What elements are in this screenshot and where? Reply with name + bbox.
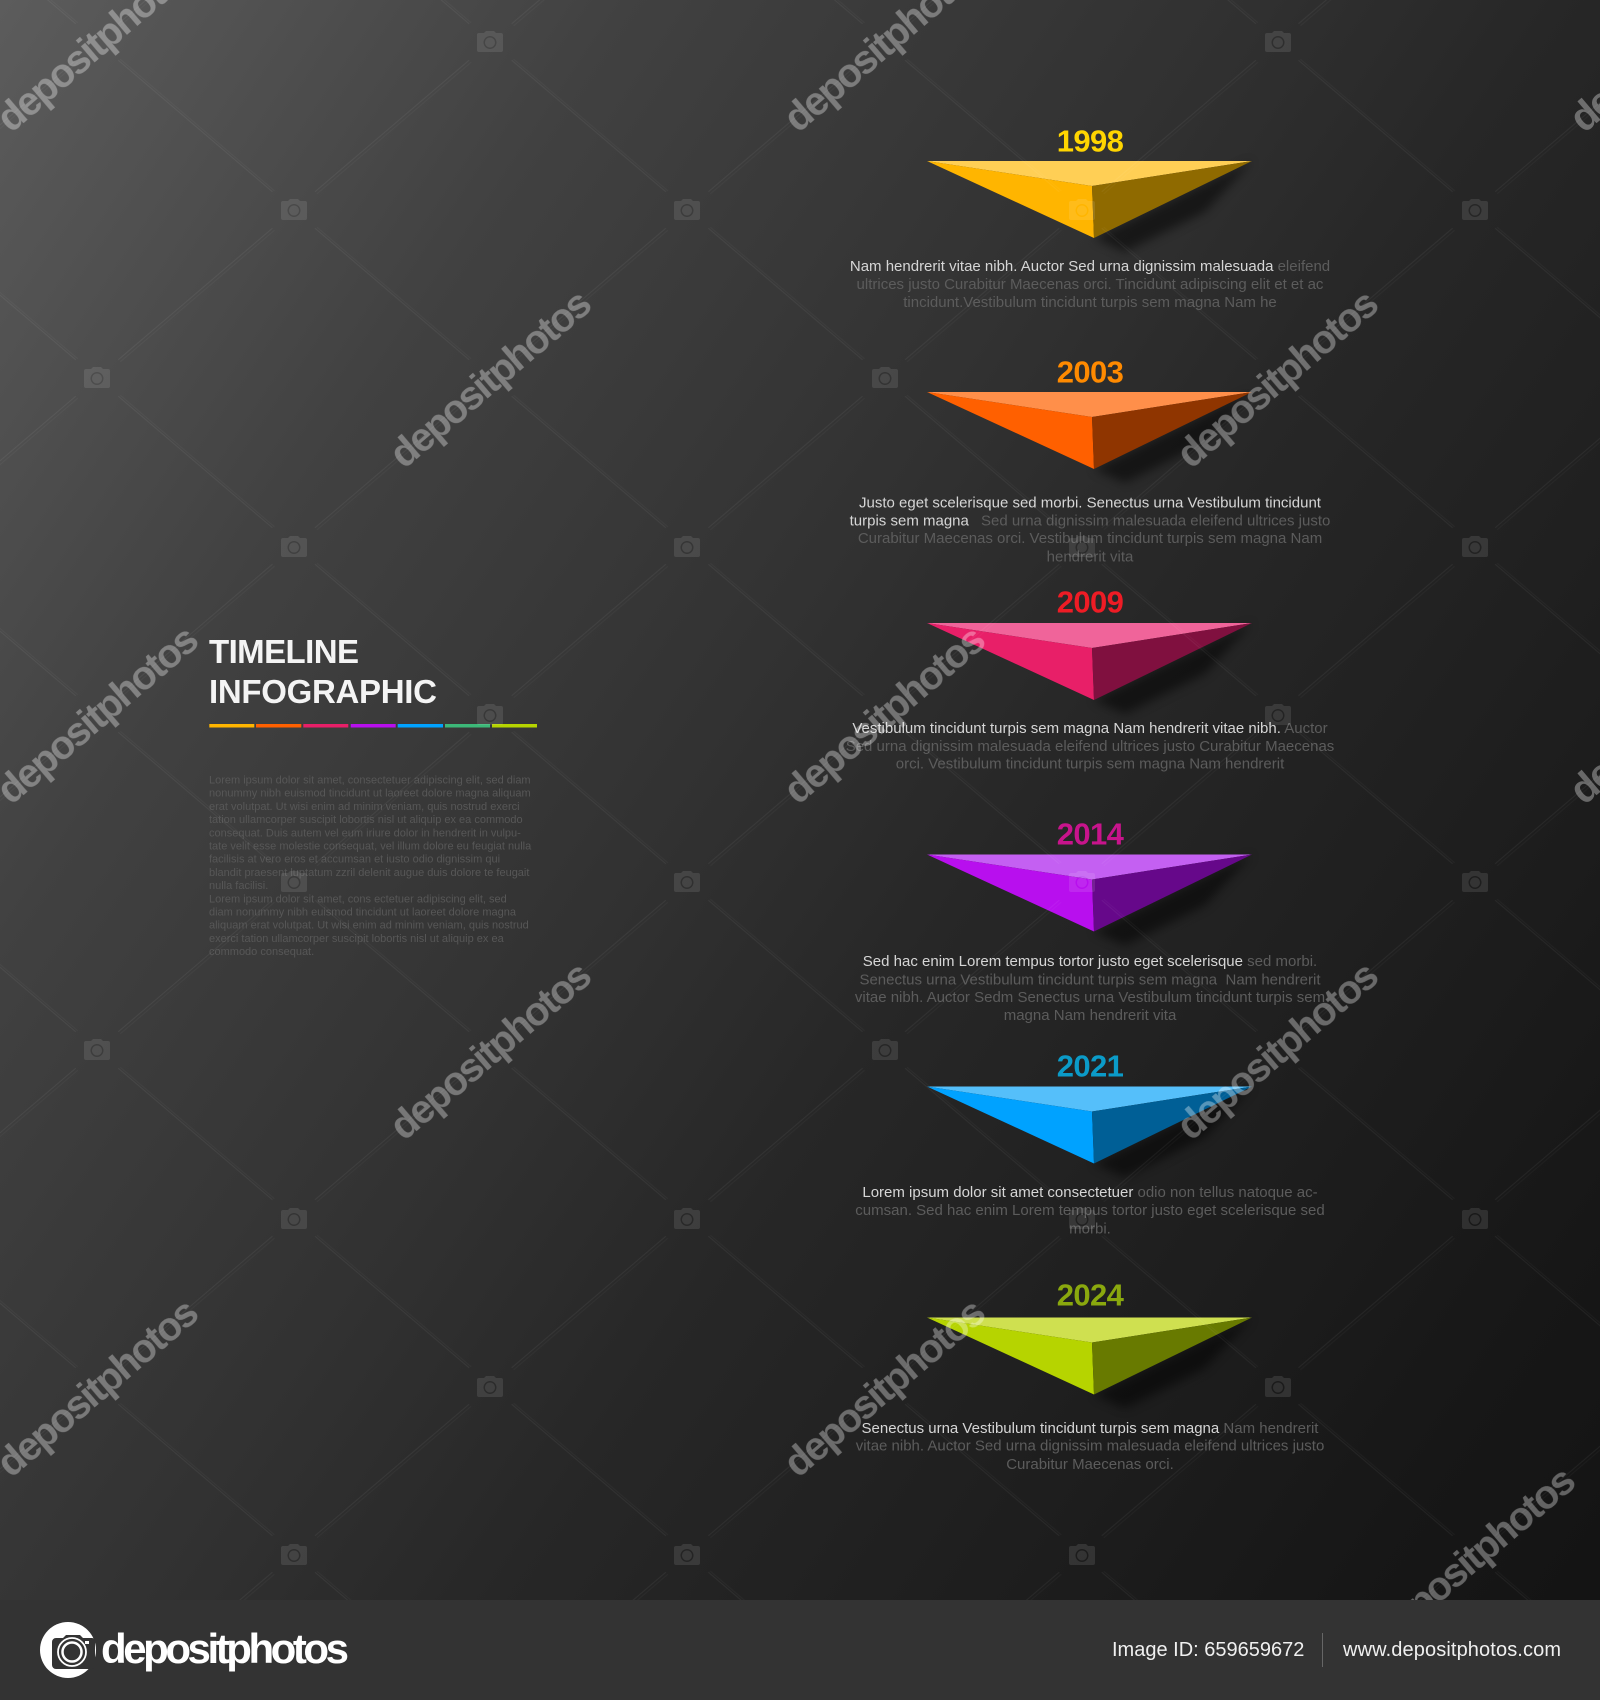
triangle 2009: [927, 623, 1252, 714]
intro paragraph: tation ullamcorper suscipit lobortis nisl ut aliquip ex ea commodo: [209, 814, 523, 826]
description 2003: turpis sem magna Sed urna dignissim malesuada eleifend ultrices justo: [850, 512, 1330, 530]
description 2003: Justo eget scelerisque sed morbi. Senectus urna Vestibulum tincidunt: [859, 494, 1322, 512]
description 2024: Curabitur Maecenas orci.: [1006, 1456, 1174, 1473]
triangle 1998: [927, 161, 1252, 252]
footer url: www.depositphotos.com: [1342, 1639, 1561, 1661]
watermark camera icons: [84, 31, 1488, 1565]
title: TIMELINE: [209, 633, 359, 670]
intro paragraph: consequat. Duis autem vel eum iriure dolor in hendrerit in vulpu-: [209, 827, 521, 839]
description 2014: magna Nam hendrerit vita: [1004, 1007, 1177, 1024]
triangle 2014: [927, 854, 1252, 946]
description 2024: [856, 1420, 1324, 1473]
footer bar: [0, 1600, 1600, 1700]
image id: Image ID: 659659672: [1112, 1639, 1304, 1661]
year 2003: 2003: [1057, 354, 1124, 390]
intro paragraph: aliquam erat volutpat. Ut wisi enim ad minim veniam, quis nostrud: [209, 920, 529, 932]
title: INFOGRAPHIC: [209, 673, 437, 710]
watermark wordmarks: depositphotos: [1168, 281, 1387, 477]
description 1998: Nam hendrerit vitae nibh. Auctor Sed urna dignissim malesuada eleifend: [850, 258, 1330, 275]
watermark wordmarks: depositphotos: [775, 617, 994, 813]
description 2021: cumsan. Sed hac enim Lorem tempus tortor justo eget scelerisque sed: [855, 1202, 1325, 1219]
year 2024: 2024: [1057, 1278, 1125, 1312]
timeline item: 2021: [855, 1048, 1325, 1238]
description 2014: vitae nibh. Auctor Sedm Senectus urna Vestibulum tincidunt turpis sem: [855, 989, 1325, 1006]
description 2024: Senectus urna Vestibulum tincidunt turpis sem magna Nam hendrerit: [862, 1420, 1319, 1437]
description 2021: [855, 1184, 1325, 1238]
description 1998: ultrices justo Curabitur Maecenas orci. Tincidunt adipiscing elit et et ac: [857, 276, 1324, 293]
description 2014: [855, 953, 1325, 1024]
triangle 2003: [927, 392, 1252, 483]
intro paragraph: [209, 774, 532, 958]
watermark wordmarks: depositphotos: [381, 953, 600, 1149]
description 2009: Vestibulum tincidunt turpis sem magna Nam hendrerit vitae nibh. Auctor: [852, 720, 1328, 737]
logo wordmark: depositphotos: [101, 1625, 349, 1672]
watermark wordmarks: depositphotos: [775, 1290, 994, 1486]
watermark wordmarks: depositphotos: [1168, 953, 1387, 1149]
triangle 2021: [927, 1086, 1252, 1178]
footer divider: [1322, 1633, 1323, 1667]
intro paragraph: blandit praesent luptatum zzril delenit augue duis dolore te feugait: [209, 867, 529, 879]
timeline item: 2009: [846, 584, 1334, 772]
title colour bar: [209, 724, 537, 728]
intro paragraph: nonummy nibh euismod tincidunt ut laoreet dolore magna aliquam: [209, 788, 531, 800]
description 2021: morbi.: [1069, 1220, 1111, 1238]
intro paragraph: Lorem ipsum dolor sit amet, consectetuer adipiscing elit, sed diam: [209, 774, 531, 786]
intro paragraph: erat volutpat. Ut wisi enim ad minim veniam, quis nostrud exerci: [209, 801, 520, 813]
description 2003: [850, 494, 1330, 566]
title: [209, 633, 437, 710]
year 2014: 2014: [1057, 816, 1125, 852]
description 1998: tincidunt.Vestibulum tincidunt turpis sem magna Nam he: [903, 294, 1277, 311]
intro paragraph: nulla facilisi.: [209, 880, 268, 892]
timeline item: 2014: [855, 816, 1325, 1024]
timeline item: 1998: [850, 124, 1330, 311]
intro paragraph: Lorem ipsum dolor sit amet, cons ectetuer adipiscing elit, sed: [209, 893, 507, 905]
timeline item: 2003: [850, 354, 1330, 566]
description 2009: orci. Vestibulum tincidunt turpis sem magna Nam hendrerit: [896, 756, 1285, 772]
description 2024: vitae nibh. Auctor Sed urna dignissim malesuada eleifend ultrices justo: [856, 1438, 1324, 1454]
year 1998: 1998: [1057, 124, 1124, 158]
triangle 2024: [927, 1318, 1252, 1408]
description 2014: Sed hac enim Lorem tempus tortor justo eget scelerisque sed morbi.: [863, 953, 1317, 970]
description 2009: Sed urna dignissim malesuada eleifend ultrices justo Curabitur Maecenas: [846, 738, 1334, 755]
description 1998: [850, 258, 1330, 311]
timeline item: 2024: [856, 1278, 1324, 1473]
description 2009: [846, 720, 1334, 772]
intro paragraph: diam nonummy nibh euismod tincidunt ut laoreet dolore magna: [209, 906, 517, 918]
description 2003: hendrerit vita: [1047, 548, 1134, 566]
description 2003: Curabitur Maecenas orci. Vestibulum tincidunt turpis sem magna Nam: [858, 530, 1322, 547]
icon: logo camera: [40, 1622, 96, 1678]
year 2021: 2021: [1057, 1048, 1124, 1084]
intro paragraph: exerci tation ullamcorper suscipit lobortis nisl ut aliquip ex ea: [209, 933, 505, 945]
intro paragraph: tate velit esse molestie consequat, vel illum dolore eu feugiat nulla: [209, 840, 532, 852]
watermark wordmarks: depositphotos: [1365, 1458, 1584, 1654]
watermark wordmarks: depositphotos: [381, 281, 600, 477]
description 2021: Lorem ipsum dolor sit amet consectetuer odio non tellus natoque ac-: [862, 1184, 1318, 1201]
description 2014: Senectus urna Vestibulum tincidunt turpis sem magna Nam hendrerit: [859, 972, 1321, 988]
intro paragraph: facilisis at vero eros et accumsan et iusto odio dignissim qui: [209, 854, 500, 866]
intro paragraph: commodo consequat.: [209, 946, 314, 958]
year 2009: 2009: [1057, 584, 1124, 620]
